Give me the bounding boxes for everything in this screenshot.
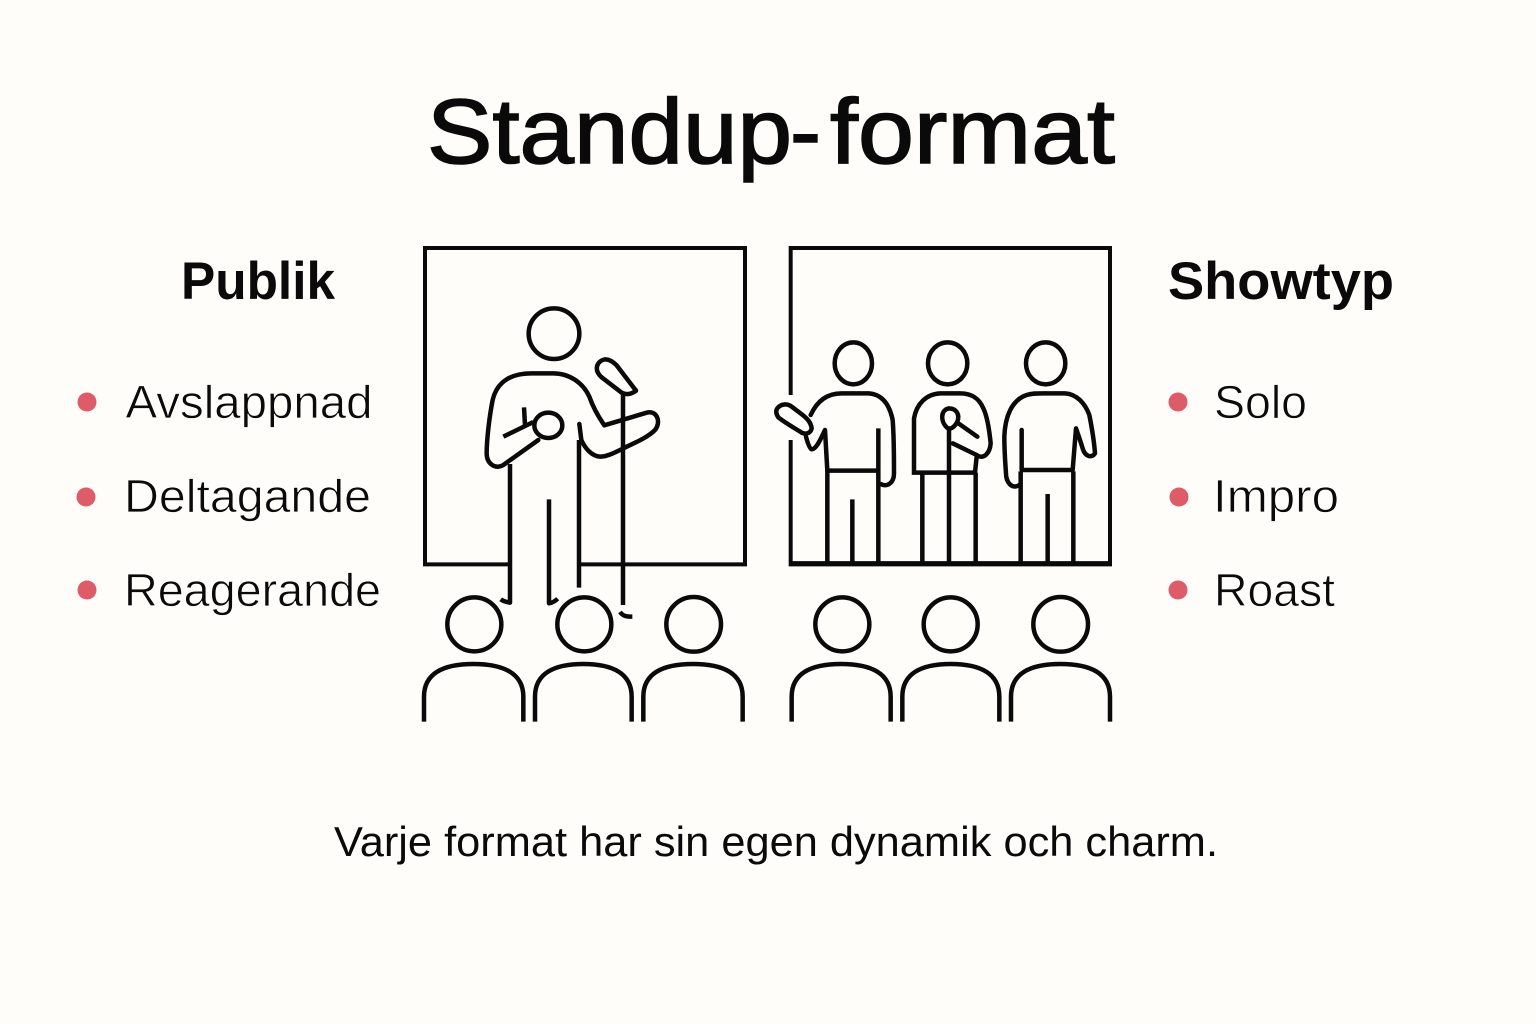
- performer: [487, 308, 658, 617]
- microphone stand: [620, 393, 632, 617]
- item: Roast: Roast: [1214, 564, 1335, 616]
- audience head 1: [815, 597, 869, 651]
- panel: Publik list: [76, 252, 381, 616]
- audience shoulders: [792, 664, 1110, 722]
- legs: [827, 428, 878, 563]
- audience head 3: [666, 597, 721, 652]
- audience head 2: [924, 597, 978, 651]
- performer hand: [534, 413, 562, 438]
- audience shoulders: [424, 664, 743, 722]
- bullet: Avslappnad: [78, 392, 96, 412]
- performer head: [529, 308, 579, 359]
- audience head 1: [447, 597, 501, 651]
- bullet: Deltagande: [76, 488, 96, 506]
- scene: group show: [776, 248, 1112, 722]
- bullet: Roast: [1168, 580, 1188, 600]
- item: Impro: Impro: [1213, 470, 1339, 522]
- audience right: [792, 597, 1110, 722]
- head: [835, 342, 872, 384]
- bullet: Impro: [1170, 488, 1188, 506]
- bullet: Reagerande: [78, 580, 96, 600]
- panel: Showtyp list: [1168, 252, 1394, 616]
- stage frame: [425, 248, 745, 564]
- audience left: [424, 597, 743, 722]
- body: [914, 393, 991, 473]
- performer 3: [1004, 342, 1095, 563]
- audience head 3: [1033, 597, 1088, 652]
- microphone head: [597, 359, 636, 394]
- caption: Varje format har sin egen dynamik och charm.: [334, 818, 1218, 865]
- bullet: Solo: [1168, 392, 1188, 412]
- legs: [1021, 471, 1073, 563]
- title: Standup: [427, 81, 792, 183]
- item: Avslappnad: Avslappnad: [126, 376, 372, 428]
- performer body and arms: [487, 373, 658, 467]
- body: [1004, 393, 1095, 487]
- microphone: [776, 404, 812, 434]
- performer 2: [914, 342, 991, 563]
- scene: solo standup: [424, 248, 745, 722]
- audience head 2: [557, 597, 611, 651]
- title: -: [790, 81, 821, 183]
- heading: Showtyp: Showtyp: [1168, 252, 1394, 311]
- performer 1: [776, 342, 894, 563]
- performer legs: [501, 440, 579, 603]
- microphone: [942, 408, 977, 437]
- heading: Publik: Publik: [181, 252, 336, 311]
- legs and stem: [922, 430, 976, 563]
- performer fingers: [503, 407, 533, 437]
- head: [928, 342, 967, 384]
- stage floor: [789, 557, 1112, 570]
- body: [806, 393, 894, 485]
- stage frame: [791, 248, 1110, 564]
- title: format: [830, 81, 1115, 183]
- head: [1026, 342, 1065, 384]
- item: Deltagande: Deltagande: [124, 470, 371, 522]
- item: Reagerande: Reagerande: [124, 564, 381, 616]
- item: Solo: Solo: [1214, 376, 1307, 428]
